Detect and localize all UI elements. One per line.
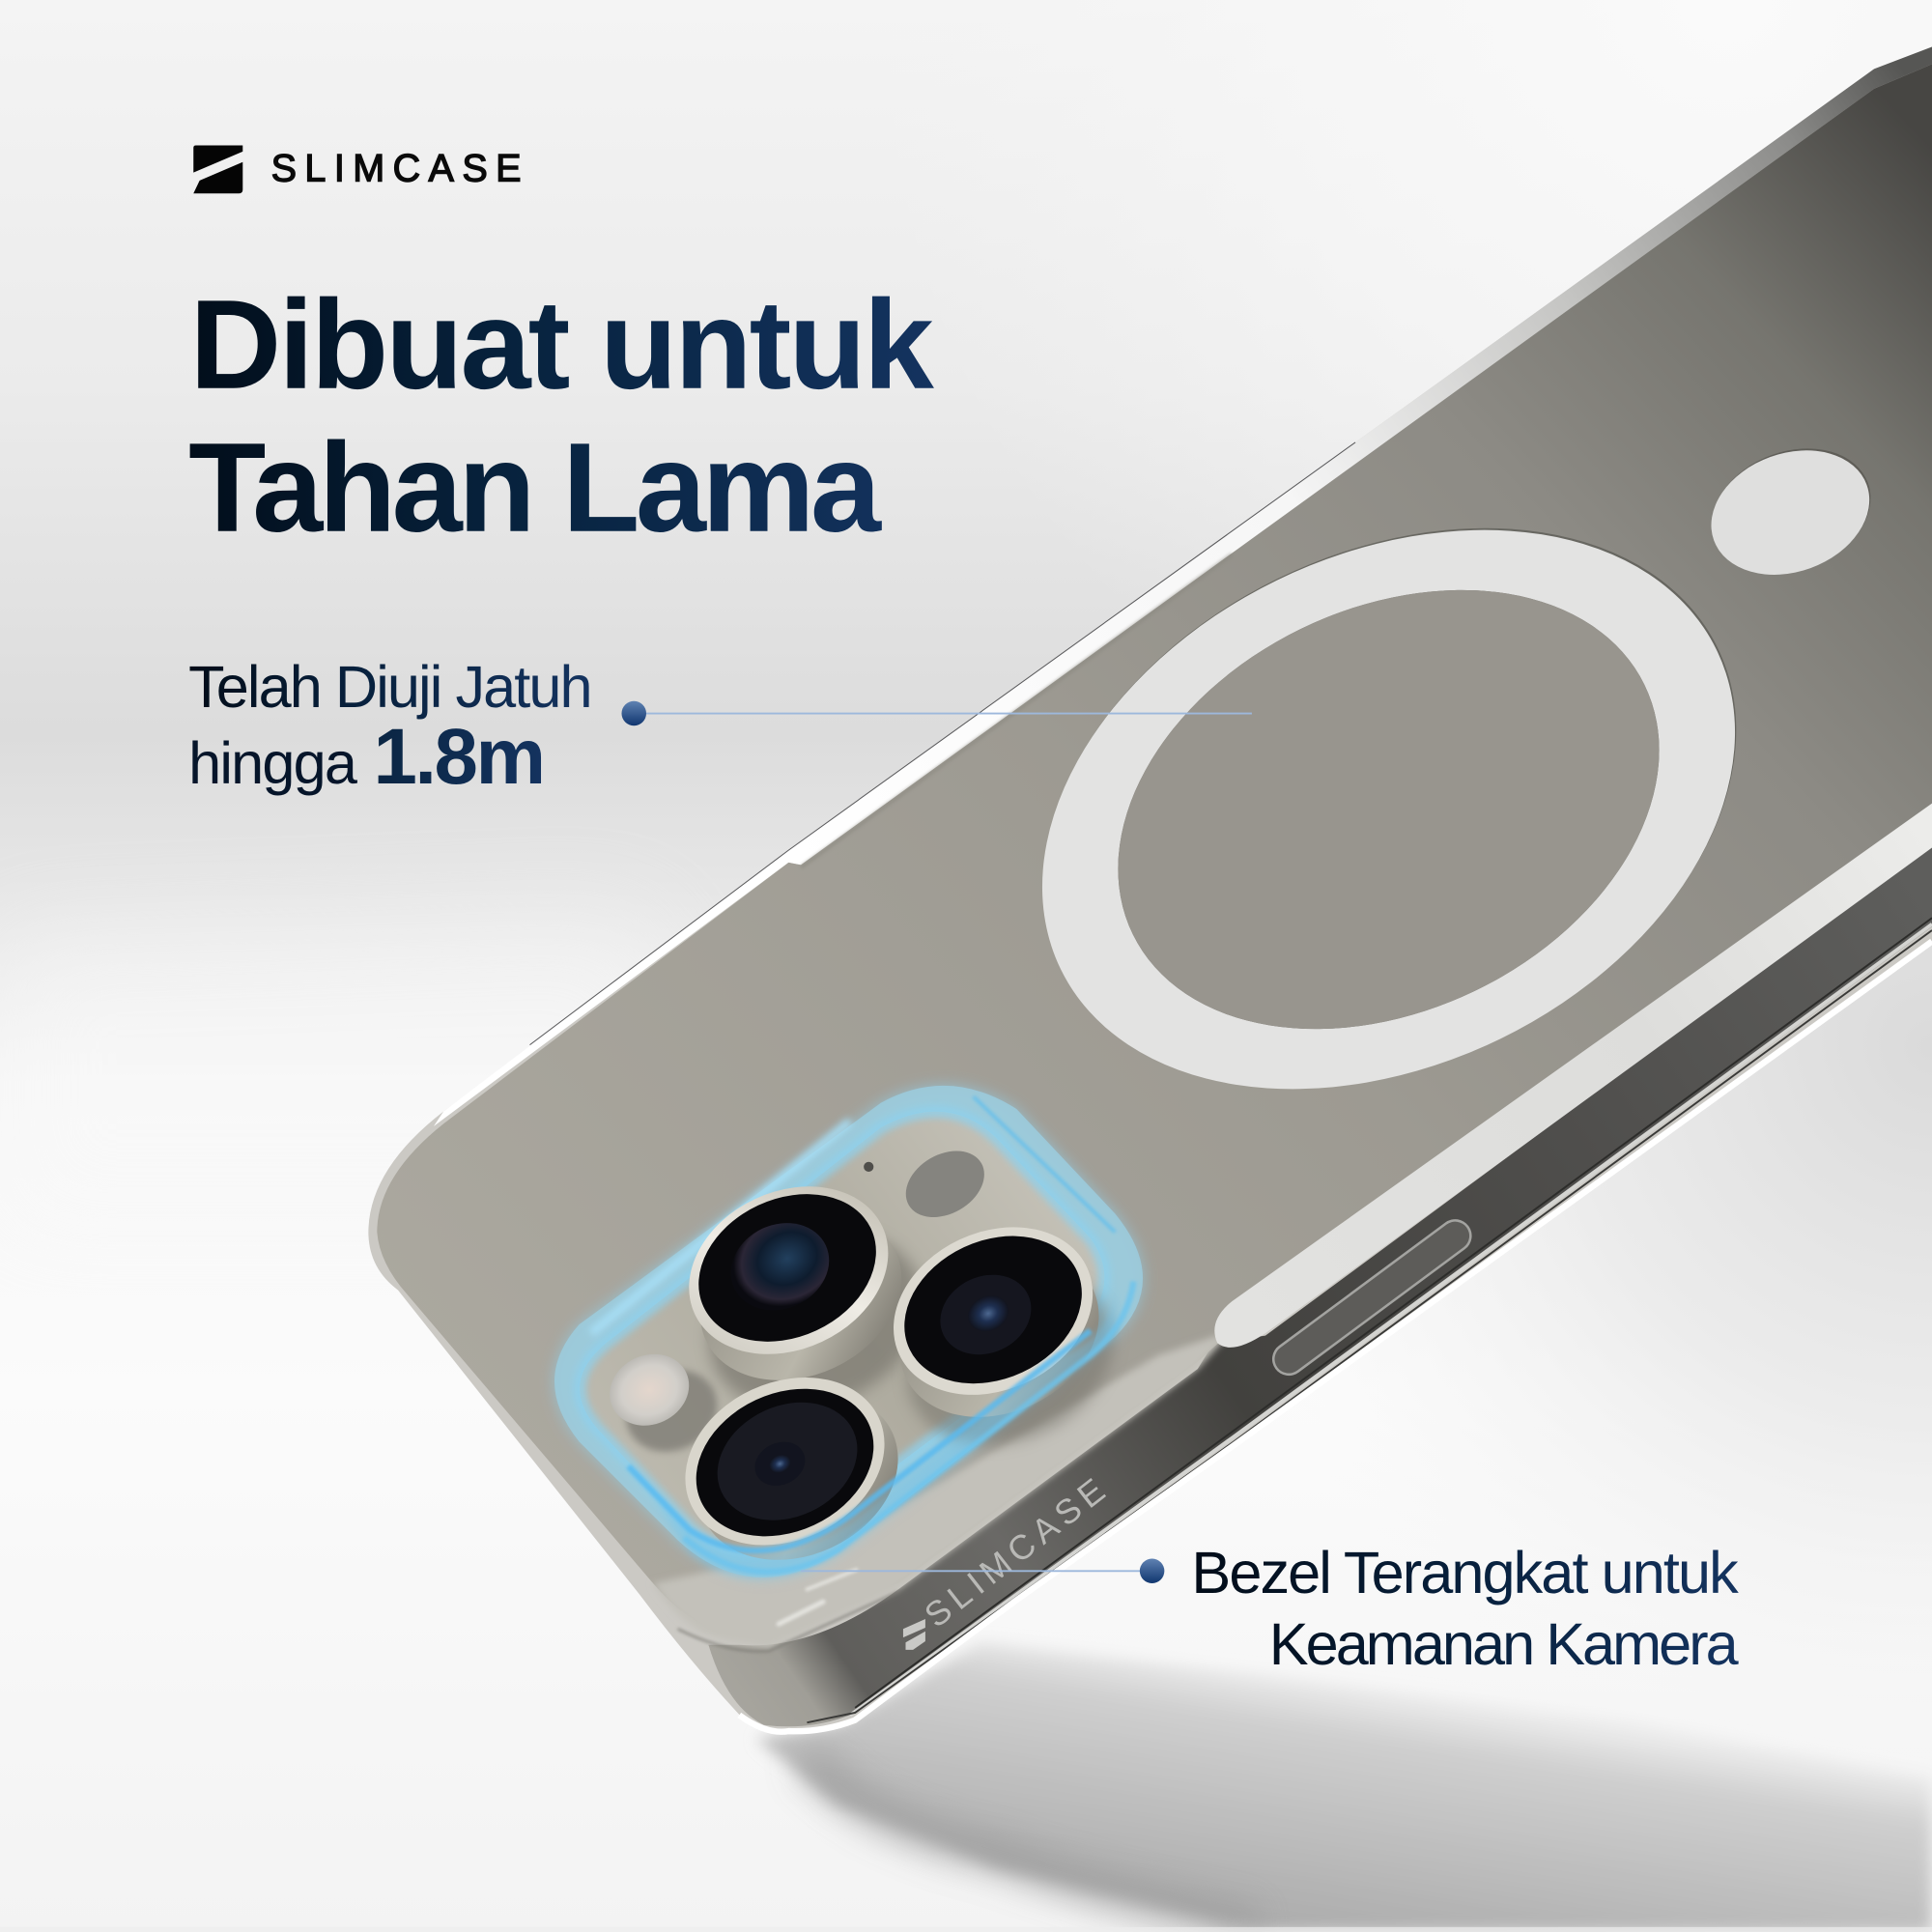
lens right [866, 1196, 1142, 1477]
callout: drop test: hingga [188, 730, 358, 796]
bezel raised ring [554, 1086, 1143, 1577]
bezel glow [554, 1086, 1143, 1577]
plate blue inner edge [580, 1112, 1104, 1551]
case silhouette [368, 46, 1932, 1734]
magnetic ring [949, 418, 1830, 1199]
phone with case [368, 46, 1932, 1734]
chrome edge lines [855, 918, 1932, 1708]
clear lip below camera [653, 1331, 1233, 1647]
translucent edge strip [1214, 804, 1932, 1348]
leader dot [1140, 1559, 1164, 1583]
camera plate [580, 1112, 1104, 1551]
lip highlights [779, 1570, 856, 1624]
lens bottom [658, 1346, 925, 1591]
callout: camera bezel [801, 1540, 1740, 1677]
bright bezel line, upper left [591, 1122, 850, 1333]
callout: drop test: 1.8m [373, 713, 546, 801]
top edge rim [434, 46, 1932, 1126]
flash [598, 1342, 730, 1466]
leader dot [621, 701, 646, 725]
title: Tahan Lama [188, 416, 882, 558]
side button [1289, 1236, 1455, 1359]
white rim [739, 941, 1932, 1732]
notch shading [801, 554, 1233, 867]
cast shadow of phone [0, 1642, 1932, 1932]
callout text: Bezel Terangkat untuk [1191, 1540, 1739, 1605]
blue glow over lower bezel [653, 1282, 1115, 1577]
leader line [640, 713, 1252, 715]
bright inner bezel line, lower right [629, 1331, 1091, 1550]
callout: drop test [188, 654, 1252, 801]
callout text: Telah Diuji Jatuh [188, 654, 593, 720]
bright bezel line, upper right [974, 1096, 1115, 1233]
side brand text: SLIMCASE [918, 1471, 1112, 1635]
case side band [708, 844, 1932, 1726]
fine dark outline of top edge [529, 442, 1355, 1045]
camera module [554, 1086, 1143, 1591]
back face of phone [377, 64, 1932, 1633]
corner edge line [678, 1592, 898, 1651]
small alignment circle [1693, 427, 1889, 596]
lens top [662, 1155, 952, 1443]
logo icon [193, 146, 242, 193]
lidar window [894, 1138, 996, 1231]
title [188, 273, 935, 558]
bright outer bezel line, lower right [684, 1282, 1133, 1572]
title: Dibuat untuk [189, 273, 935, 415]
callout: camera bezel: Keamanan Kamera [1269, 1611, 1740, 1677]
leader line [801, 1570, 1146, 1572]
brand logo [193, 146, 522, 193]
microphone [864, 1162, 873, 1172]
logo wordmark: SLIMCASE [271, 147, 522, 189]
